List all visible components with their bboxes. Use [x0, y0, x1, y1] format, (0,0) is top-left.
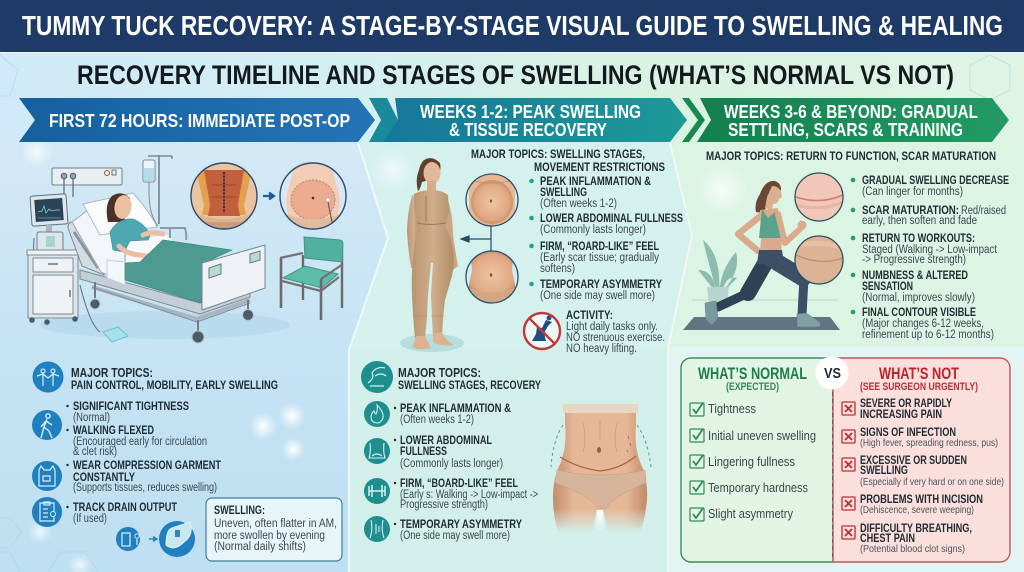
list: warning items with X icons: PROBLEMS WITH INCISION [860, 494, 983, 506]
text: first 72 hours list: SIGNIFICANT TIGHTNESS [73, 399, 189, 413]
text: weeks 3-6 list: -> Progressive strength) [862, 254, 966, 266]
list: normal items with check icons: Tightness [708, 401, 756, 416]
back arm [738, 214, 763, 251]
heading: what's normal [698, 364, 807, 393]
inset: faded scar [795, 236, 843, 284]
icon: walking [32, 410, 62, 440]
list: normal items with check icons: Slight asymmetry [708, 506, 793, 521]
callout: swelling: SWELLING: [214, 503, 265, 517]
inset: fresh scar [795, 173, 843, 221]
text: first 72 hours list: (Normal) [73, 412, 110, 424]
text: weeks 3-6 list [851, 173, 1009, 341]
icon: plant [698, 240, 737, 303]
text: weeks 1-2 list: (Commonly lasts longer) [540, 224, 646, 236]
text: weeks 3-6 list: RETURN TO WORKOUTS: [862, 231, 975, 245]
ribbon: weeks 1-2 [369, 98, 687, 142]
text: weeks 1-2 major topics bottom [398, 365, 541, 392]
list: warning items with X icons: DIFFICULTY BREATHING, [860, 523, 972, 535]
ribbon: weeks 1-2: & TISSUE RECOVERY [449, 119, 608, 140]
illustration: healed abdomen with scar [551, 404, 651, 533]
text: first 72 hours list: WALKING FLEXED [73, 423, 154, 437]
heading: what's not: WHAT’S NOT [879, 364, 959, 383]
ribbon: first 72 hours: FIRST 72 HOURS: IMMEDIATE POST-OP [49, 110, 350, 131]
text: first 72 hours list: WEAR COMPRESSION GARMENT [73, 458, 222, 472]
text: activity: NO heavy lifting. [566, 343, 637, 355]
list: warning items with X icons: SEVERE OR RAPIDLY [860, 398, 952, 410]
text: weeks 3-6 list: (Normal, improves slowly) [862, 292, 975, 304]
front arm [778, 214, 801, 243]
illustration: runner lunging with plant [683, 181, 840, 330]
panel: first 72 hours background [0, 142, 388, 572]
ribbon: weeks 3-6 [682, 98, 1009, 142]
list: normal items with check icons: Lingering fullness [708, 454, 795, 469]
text: first 72 hours list [66, 399, 222, 525]
icon: no heavy activity [524, 313, 560, 349]
callout: swelling: more swollen by evening [214, 530, 325, 542]
text: weeks 1-2 bottom list: FULLNESS [400, 444, 447, 458]
list: warning items with X icons: INCREASING PAIN [860, 409, 942, 421]
text: weeks 1-2 major topics bottom: MAJOR TOPICS: [398, 365, 481, 380]
text: first 72 hours list: CONSTANTLY [73, 470, 135, 484]
text: weeks 1-2 bottom list: PEAK INFLAMMATION & [400, 401, 511, 415]
legs and torso [412, 190, 454, 338]
panel: what's normal [681, 358, 833, 562]
text: weeks 1-2 list [529, 174, 683, 302]
list: warning items with X icons: (Potential blood clot signs) [860, 543, 965, 555]
text: weeks 3-6 list: refinement up to 6-12 months) [862, 329, 994, 341]
icon: lower abdomen [364, 438, 390, 464]
text: weeks 1-2 major topics [471, 147, 665, 174]
text: weeks 1-2 bottom list: (Often weeks 1-2) [400, 414, 474, 426]
icon: call button pad [80, 285, 100, 332]
icon: exercise mat [683, 317, 840, 330]
illustration: hospital room with patient in bed [27, 155, 290, 343]
icon: flame [364, 401, 390, 427]
shoes [705, 301, 718, 325]
text: weeks 1-2 list: (One side may swell more) [540, 290, 655, 302]
icon: IV stand and bag [143, 155, 172, 226]
text: activity: Light daily tasks only. [566, 321, 658, 333]
text: first 72 hours list: TRACK DRAIN OUTPUT [73, 500, 178, 514]
text: weeks 1-2 list: softens) [540, 263, 575, 275]
text: first 72 hours list: & clet risk) [73, 446, 117, 458]
text: weeks 1-2 list: TEMPORARY ASYMMETRY [540, 277, 662, 291]
ribbon: weeks 3-6: WEEKS 3-6 & BEYOND: GRADUAL [724, 101, 978, 122]
icon: footboard [202, 245, 265, 310]
text: activity [566, 308, 665, 355]
text: weeks 3-6 list: SENSATION [862, 279, 913, 293]
text: weeks 3-6 list: Red/raised [961, 205, 1006, 217]
text: first 72 hours list: (If used) [73, 513, 107, 525]
icon: wall panel [52, 168, 122, 205]
text: weeks 3-6 list: Staged (Walking -> Low-impact [862, 244, 998, 256]
list: warning items with X icons: SIGNS OF INFECTION [860, 427, 956, 439]
white sheet across the waist [125, 235, 172, 266]
callout: swelling: Uneven, often flatter in AM, [214, 518, 337, 530]
panel: weeks 3-6 background [668, 142, 1024, 347]
back leg [748, 258, 768, 293]
inset: swollen abdomen bottom [466, 250, 518, 306]
text: weeks 1-2 bottom list: FIRM, “BOARD-LIKE” FEEL [400, 476, 518, 490]
text: first 72 hours list: (Supports tissues, reduces swelling) [73, 482, 217, 494]
text: weeks 1-2 list: (Often weeks 1-2) [540, 198, 617, 210]
text: weeks 1-2 major topics bottom: SWELLING STAGES, RECOVERY [398, 378, 541, 392]
icon: major topics people [32, 362, 64, 392]
heading: what's not [860, 364, 978, 393]
icon: clipboard [32, 497, 62, 527]
text: weeks 1-2 bottom list: (Early s: Walking -> Low-impact -> [400, 489, 538, 501]
text: weeks 1-2 bottom list: TEMPORARY ASYMMETRY [400, 517, 522, 531]
ribbon: first 72 hours [19, 98, 375, 142]
list: warning items with X icons: (Dehiscence, severe weeping) [860, 504, 974, 516]
title banner [0, 0, 1024, 54]
icon: dumbbell [364, 478, 390, 504]
icon: patient [107, 193, 163, 258]
icon: compression garment [32, 461, 62, 491]
torso [760, 208, 782, 254]
illustration: woman in compression garment [400, 158, 464, 352]
text: first 72 hours list: (Encouraged early for circulation [73, 436, 207, 448]
list: warning items with X icons: EXCESSIVE OR SUDDEN [860, 455, 967, 467]
icon: vital signs monitor and cabinet [27, 194, 80, 325]
icon: chair [280, 237, 343, 320]
arms [407, 195, 420, 268]
heading: what's normal: (EXPECTED) [726, 381, 779, 393]
text: weeks 1-2 major topics: MOVEMENT RESTRICTIONS [534, 160, 665, 174]
icon: drain bulb to emptying [116, 521, 195, 557]
text: weeks 3-6 list: early, then soften and fade [862, 215, 977, 227]
heading: what's normal: WHAT’S NORMAL [698, 364, 807, 383]
text: weeks 3-6 list: FINAL CONTOUR VISIBLE [862, 305, 976, 319]
panel: weeks 1-2 background [348, 142, 692, 572]
runner [705, 181, 820, 327]
arrow: connector to body [461, 226, 491, 251]
front leg [770, 258, 803, 278]
panel: what's normal vs what's not [681, 356, 1010, 562]
text: weeks 1-2 bottom list: (One side may swell more) [400, 530, 510, 542]
text: weeks 1-2 major topics: MAJOR TOPICS: SWELLING STAGES, [471, 147, 645, 161]
text: weeks 1-2 list: LOWER ABDOMINAL FULLNESS [540, 211, 683, 225]
list: normal items with check icons: Initial uneven swelling [708, 428, 816, 443]
icon: bed [68, 193, 265, 343]
ribbon: weeks 1-2: WEEKS 1-2: PEAK SWELLING [420, 101, 641, 122]
panel: bottom right background [668, 347, 1024, 572]
text: weeks 1-2 bottom list: Progressive strength) [400, 499, 488, 511]
ribbon: weeks 3-6: SETTLING, SCARS & TRAINING [728, 119, 963, 140]
list: warning items with X icons [842, 398, 1004, 555]
icon: swelling stages [361, 361, 393, 393]
badge: VS: VS [824, 366, 841, 382]
badge: VS [816, 356, 848, 390]
list: normal items with check icons: Temporary hardness [708, 480, 808, 495]
text: weeks 1-2 bottom list [394, 401, 538, 542]
list: normal items with check icons [690, 401, 816, 521]
text: weeks 1-2 bottom list: (Commonly lasts longer) [400, 458, 503, 470]
arrow [263, 192, 274, 200]
panel: what's not [833, 358, 1010, 562]
callout: swelling [206, 498, 342, 561]
inset: abdominal repair [191, 163, 257, 232]
text: major topics pain control: MAJOR TOPICS: [71, 365, 153, 380]
icon: torso asymmetry [364, 516, 390, 542]
text: activity: ACTIVITY: [566, 308, 613, 322]
text: weeks 1-2 list: (Early scar tissue; gradually [540, 252, 659, 264]
inset: swollen abdomen top [466, 174, 518, 226]
text: weeks 1-2 list: PEAK INFLAMMATION & [540, 174, 651, 188]
text: weeks 3-6 list: SCAR MATURATION: [862, 203, 959, 217]
text: major topics pain control: PAIN CONTROL, MOBILITY, EARLY SWELLING [71, 378, 278, 392]
list: warning items with X icons: SWELLING [860, 465, 908, 477]
heading: what's not: (SEE SURGEON URGENTLY) [860, 381, 978, 393]
callout: swelling: (Normal daily shifts) [214, 541, 306, 553]
text: activity: NO strenuous exercise. [566, 332, 665, 344]
icon: pillow [83, 193, 157, 235]
text: weeks 1-2 list: FIRM, “ROARD-LIKE” FEEL [540, 239, 659, 253]
inset: closed abdomen with drain [278, 160, 348, 232]
text: weeks 1-2 list: SWELLING [540, 185, 587, 199]
text: weeks 1-2 bottom list: LOWER ABDOMINAL [400, 433, 492, 447]
icon: blanket [107, 260, 125, 285]
list: warning items with X icons: CHEST PAIN [860, 533, 915, 545]
text: weeks 3-6 list: NUMBNESS & ALTERED [862, 268, 968, 282]
text: major topics pain control [71, 365, 278, 392]
text: weeks 3-6 list: (Major changes 6-12 weeks, [862, 318, 984, 330]
text: weeks 3-6 list: (Can linger for months) [862, 186, 963, 198]
